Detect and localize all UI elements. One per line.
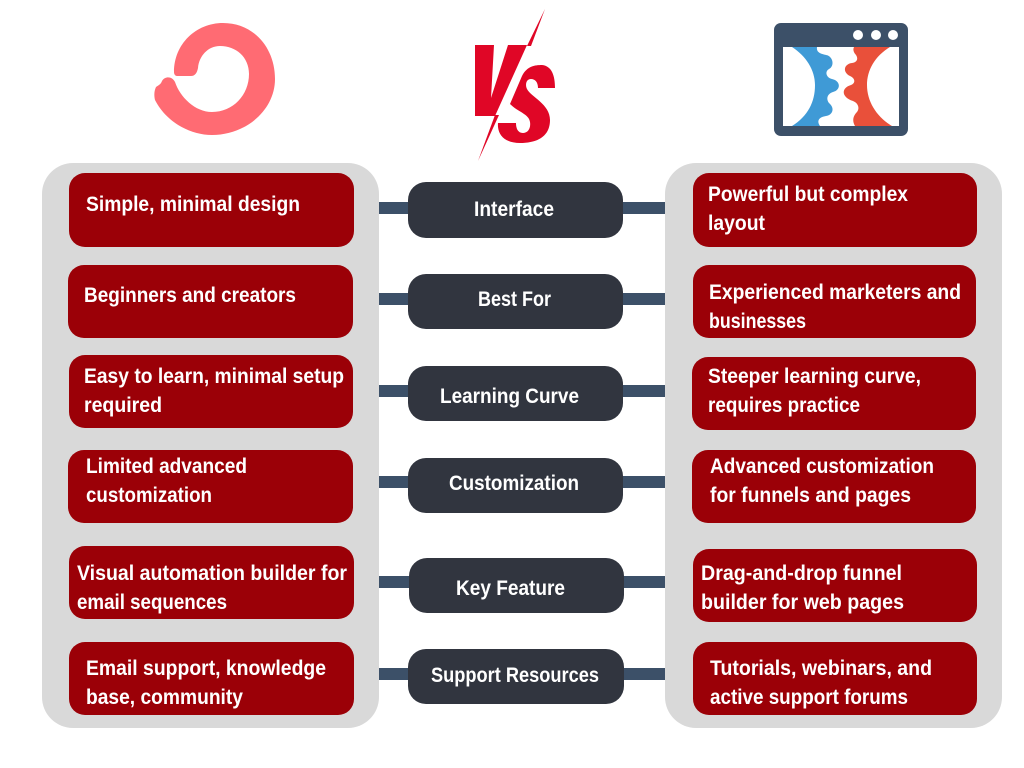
row label: Learning Curve bbox=[379, 366, 665, 421]
row label: Support Resources: Support Resources bbox=[431, 664, 599, 687]
row label: Learning Curve: Learning Curve bbox=[440, 385, 579, 408]
card: key feature right: builder for web pages bbox=[701, 591, 904, 614]
card: customization right: for funnels and pages bbox=[710, 484, 911, 507]
card: support right bbox=[693, 642, 977, 715]
card: learning curve left bbox=[69, 355, 353, 428]
card: best for left: Beginners and creators bbox=[84, 284, 296, 307]
card: customization left: customization bbox=[86, 484, 212, 507]
card: support right: active support forums bbox=[710, 686, 908, 709]
card: support left: Email support, knowledge bbox=[86, 657, 326, 680]
card: customization left bbox=[68, 450, 353, 523]
card: best for right bbox=[693, 265, 976, 338]
card: interface right: Powerful but complex bbox=[708, 183, 908, 206]
card: interface left: Simple, minimal design bbox=[86, 193, 300, 216]
card: interface right bbox=[693, 173, 977, 247]
row label: Key Feature bbox=[379, 558, 665, 613]
row label: Interface bbox=[379, 182, 665, 238]
panel: left column bbox=[42, 163, 379, 728]
icon: browser funnel logo bbox=[774, 23, 908, 136]
row label: Best For: Best For bbox=[478, 288, 551, 311]
icon: VS mark bbox=[475, 9, 555, 161]
card: key feature left bbox=[69, 546, 354, 619]
card: interface right: layout bbox=[708, 212, 765, 235]
card: learning curve left: Easy to learn, minimal setup bbox=[84, 365, 344, 388]
card: best for right: Experienced marketers and bbox=[709, 281, 961, 304]
card: customization left: Limited advanced bbox=[86, 455, 247, 478]
row label: Interface: Interface bbox=[474, 198, 554, 221]
card: support left bbox=[69, 642, 354, 715]
row label: Best For bbox=[379, 274, 665, 329]
card: customization right bbox=[692, 450, 976, 523]
row label: Support Resources bbox=[379, 649, 665, 704]
card: support left: base, community bbox=[86, 686, 243, 709]
row label: Customization: Customization bbox=[449, 472, 579, 495]
card: key feature left: email sequences bbox=[77, 591, 227, 614]
card: learning curve left: required bbox=[84, 394, 162, 417]
icon: red ring logo bbox=[154, 23, 275, 135]
card: learning curve right: Steeper learning curve, bbox=[708, 365, 921, 388]
row label: Customization bbox=[379, 458, 665, 513]
card: support right: Tutorials, webinars, and bbox=[710, 657, 932, 680]
panel: right column bbox=[665, 163, 1002, 728]
card: learning curve right: requires practice bbox=[708, 394, 860, 417]
row label: Key Feature: Key Feature bbox=[456, 577, 565, 600]
card: key feature right: Drag-and-drop funnel bbox=[701, 562, 902, 585]
card: key feature right bbox=[693, 549, 977, 622]
card: interface left bbox=[69, 173, 354, 247]
card: best for left bbox=[68, 265, 353, 338]
card: learning curve right bbox=[692, 357, 976, 430]
card: customization right: Advanced customization bbox=[710, 455, 934, 478]
card: key feature left: Visual automation builder for bbox=[77, 562, 347, 585]
card: best for right: businesses bbox=[709, 310, 806, 333]
